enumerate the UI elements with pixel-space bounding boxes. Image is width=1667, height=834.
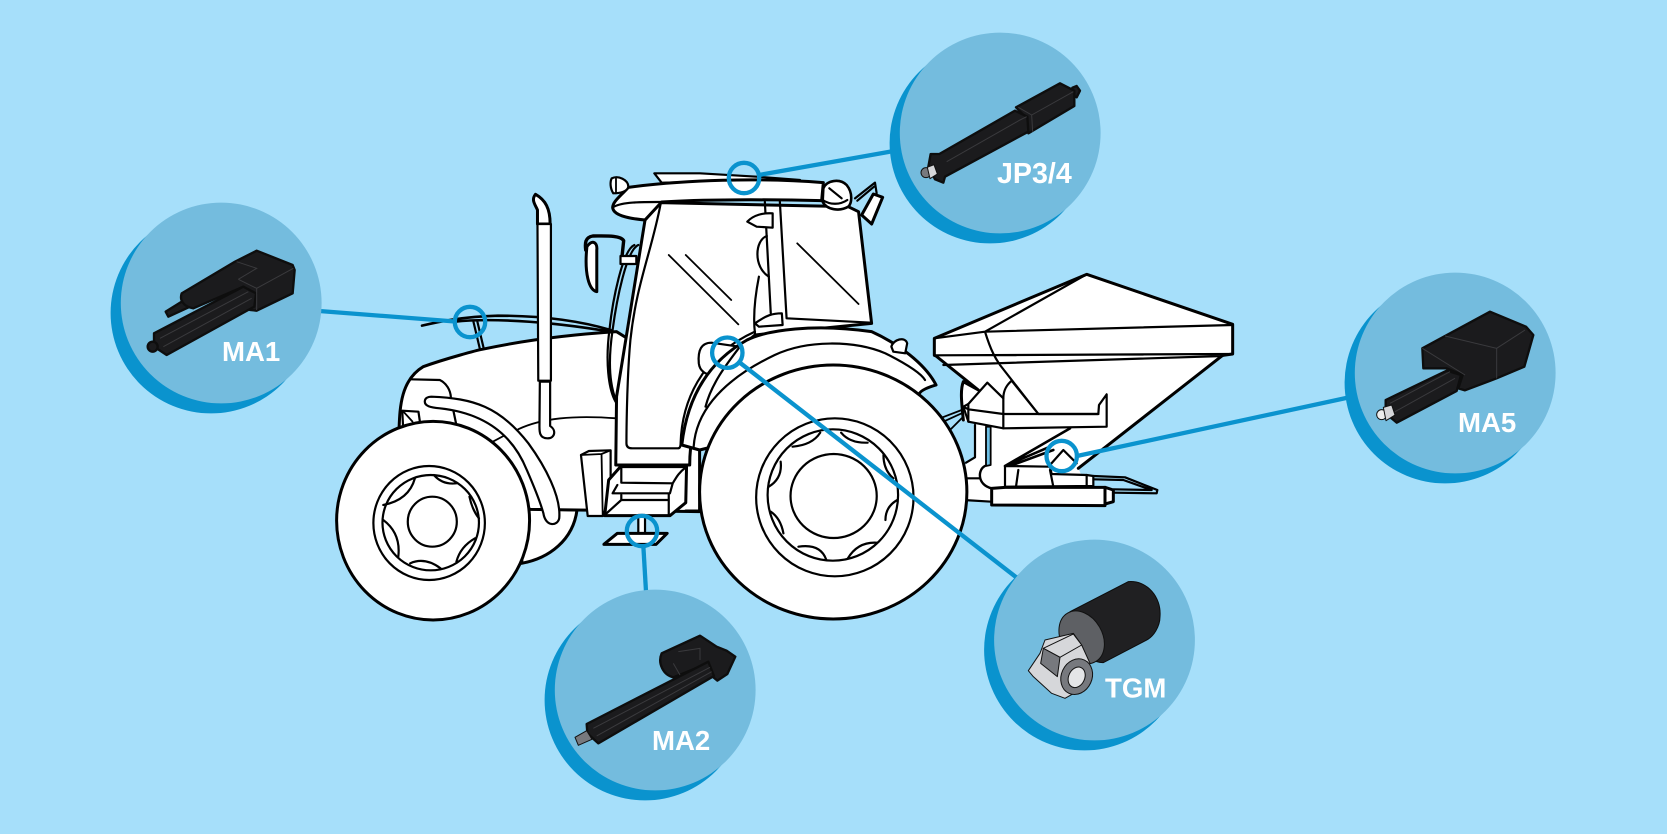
motor housing [181, 251, 295, 311]
rear pin [1072, 86, 1080, 97]
marker ring MA2 [627, 516, 657, 546]
fender inner band [694, 344, 925, 447]
badge [900, 33, 1101, 233]
rear hub [791, 454, 877, 538]
hub bulge [980, 466, 992, 488]
rear pin [166, 301, 189, 317]
post edges [963, 425, 992, 502]
tube tip [148, 342, 158, 352]
marker ring MA1 [455, 307, 485, 337]
cab [616, 203, 872, 465]
front rim inner [382, 475, 479, 570]
frame tip [1105, 487, 1113, 504]
rear fender [682, 328, 936, 450]
label JP3/4: JP3/4 [997, 158, 1072, 190]
callout MA5 [1345, 273, 1556, 483]
lamp stroke [403, 412, 413, 422]
step treads [605, 467, 686, 515]
pedal plate [604, 533, 667, 544]
spreader hitch arms [940, 410, 963, 430]
steps box [581, 450, 611, 516]
connector TGM [739, 362, 1030, 588]
rear lugs [769, 433, 897, 559]
roof under curve [614, 202, 662, 207]
badge [555, 590, 756, 790]
clevis [575, 731, 592, 745]
front rim outer [373, 466, 485, 580]
badge shadow [984, 550, 1185, 750]
actuator MA1 [148, 251, 295, 355]
motor [660, 636, 735, 681]
actuator MA5 [1377, 312, 1533, 423]
roof [613, 180, 823, 220]
right mirror arm [855, 183, 877, 201]
headlight panel [411, 379, 456, 423]
tube [928, 111, 1028, 183]
mirror clamp [621, 256, 636, 264]
actuator JP3/4 [921, 83, 1080, 183]
cab hoses [608, 245, 638, 403]
cab roof assembly [611, 173, 883, 228]
gearbox top [1043, 634, 1082, 657]
right beacon details [823, 188, 847, 204]
post strip [986, 427, 991, 466]
exhaust top [533, 194, 550, 224]
cab sill [616, 464, 690, 466]
cab side bulge [754, 236, 769, 333]
connector MA2 [643, 547, 646, 600]
rear rim inner [768, 429, 898, 561]
connector MA5 [1077, 395, 1360, 456]
marker ring TGM [712, 338, 742, 368]
upper hinge [747, 213, 773, 228]
right mirror [862, 194, 883, 224]
hopper outline [934, 274, 1233, 468]
badge [121, 203, 322, 403]
front fender [425, 397, 559, 524]
callout TGM [984, 540, 1195, 750]
badge shadow [1345, 283, 1545, 483]
front lamp [402, 411, 420, 426]
door outline [626, 203, 755, 448]
upper housing [1005, 466, 1093, 487]
badge [994, 540, 1195, 740]
label MA5: MA5 [1458, 407, 1516, 438]
tip collar [927, 165, 937, 179]
front bracket [963, 381, 1107, 428]
left beacon line [615, 178, 617, 193]
front lugs [383, 475, 479, 568]
rear tyre [700, 365, 967, 619]
roof vent [654, 173, 800, 183]
label TGM: TGM [1105, 672, 1166, 704]
cab pillars [765, 202, 872, 323]
motor housing [1016, 83, 1074, 133]
left mirror [586, 242, 597, 292]
extension tube [154, 287, 256, 355]
connector JP3/4 [759, 149, 905, 175]
rear light on fender [891, 339, 907, 353]
marker ring JP3/4 [729, 163, 759, 193]
badge shadow [545, 600, 745, 800]
tractor [337, 173, 967, 620]
rear rim outer [756, 418, 914, 576]
body to tyre line [686, 509, 702, 512]
output ring [1055, 654, 1098, 700]
spreader rod loop [1093, 476, 1157, 493]
fender strut [493, 436, 503, 442]
output bore [1065, 664, 1088, 690]
motor TGM [1028, 582, 1160, 700]
steps [605, 467, 687, 516]
connector lines [300, 149, 1360, 600]
marker ring MA5 [1046, 441, 1077, 471]
tube [587, 662, 714, 743]
tractor hood and body [399, 332, 700, 512]
exhaust tube [537, 224, 551, 381]
door handle [699, 343, 740, 375]
gearbox shade [1041, 648, 1060, 677]
box edge [581, 450, 611, 516]
tube grooves [160, 262, 293, 347]
connector MA1 [300, 310, 455, 322]
intake stem [473, 322, 484, 350]
callout JP3/4 [890, 33, 1101, 243]
hopper edges [934, 274, 1233, 414]
spreader hopper [934, 274, 1233, 506]
tube [1386, 371, 1461, 423]
callout MA2 [545, 590, 756, 800]
front tyre [337, 421, 530, 620]
lower hinge [755, 313, 783, 327]
lower frame [992, 487, 1105, 506]
label MA1: MA1 [222, 336, 280, 367]
housing and tube creases [1390, 330, 1525, 412]
tip [921, 168, 931, 178]
left mirror arm [585, 236, 624, 263]
bracket folds [963, 398, 1098, 428]
lower body line [518, 417, 617, 429]
tube highlights [947, 92, 1073, 162]
exhaust lower [539, 382, 554, 438]
glass reflections [669, 243, 859, 324]
gearbox back [1028, 633, 1090, 698]
front wheel back [522, 508, 577, 563]
badge shadow [890, 43, 1090, 243]
right beacon [823, 181, 851, 209]
badge [1355, 273, 1556, 473]
housing [1422, 312, 1533, 390]
label MA2: MA2 [652, 725, 710, 756]
grooves [593, 648, 712, 736]
spreader white backing [965, 423, 1087, 502]
air intake pipe [422, 316, 611, 332]
left beacon [611, 177, 628, 193]
callout MA1 [111, 203, 322, 413]
cylinder [1070, 582, 1160, 663]
housing details [1016, 450, 1087, 487]
tip collar [1383, 405, 1395, 421]
hopper body fill [934, 274, 1233, 468]
actuator MA2 [575, 636, 735, 745]
front hub [408, 497, 457, 547]
tip [1377, 410, 1387, 420]
badge shadow [111, 213, 311, 413]
flange [1050, 603, 1114, 672]
cone lower edge [1005, 428, 1070, 466]
pedal stem [638, 515, 645, 534]
